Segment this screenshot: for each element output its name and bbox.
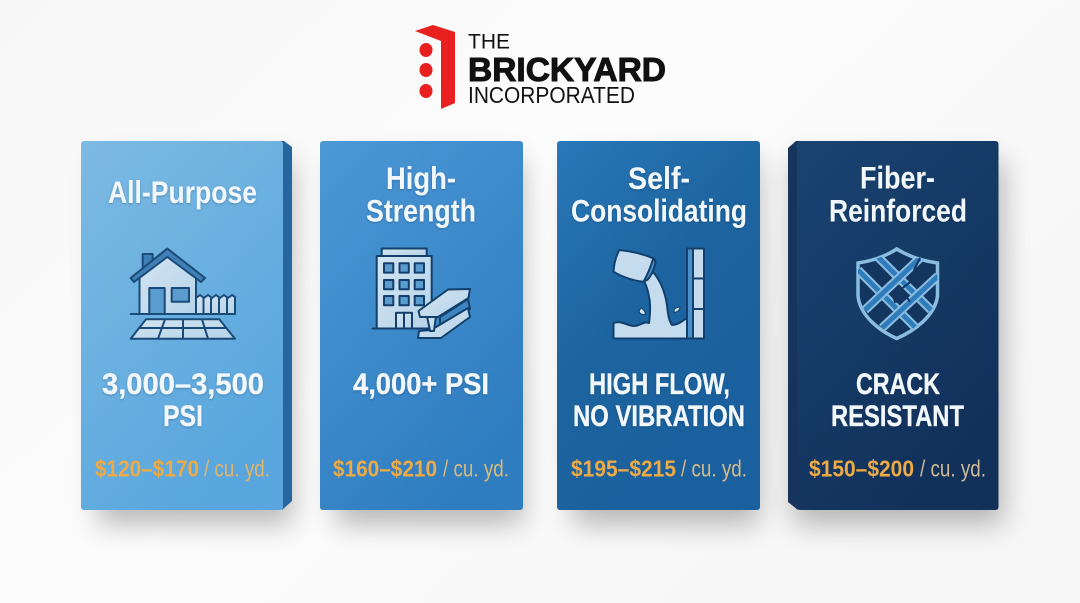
spec: NO VIBRATION [573,400,745,433]
heading: Reinforced [829,192,967,228]
logo text: THE [468,30,510,54]
heading: All-Purpose [108,174,257,210]
heading [829,160,967,228]
logo text: INCORPORATED [468,82,635,108]
logo text [468,30,666,108]
spec: 3,000–3,500 [102,368,264,401]
price: $160–$210 [333,456,437,482]
icon: building and steel beam [372,248,470,338]
panel: All-Purpose [81,141,292,524]
price [333,456,509,482]
spec [102,368,264,433]
heading: Consolidating [571,192,747,228]
panel: Fiber-Reinforced [788,141,1003,524]
price: / cu. yd. [204,456,270,482]
spec [831,368,964,433]
heading: Strength [366,192,476,228]
icon: concrete pour against formwork [614,248,704,338]
heading [366,160,476,228]
spec: 4,000+ PSI [353,368,489,401]
heading: Fiber- [860,160,935,196]
spec: HIGH FLOW, [589,368,730,401]
logo text: BRICKYARD [468,51,666,88]
panel: High-Strength [320,141,523,524]
spec [573,368,745,433]
panel: Self-Consolidating [557,141,760,524]
price: / cu. yd. [681,456,747,482]
price: / cu. yd. [920,456,986,482]
spec: PSI [163,400,203,433]
price [809,456,986,482]
price: $150–$200 [809,456,914,482]
heading: Self- [628,160,690,196]
heading [571,160,747,228]
price [95,456,270,482]
icon: house with fence and pavers [131,248,235,339]
price: $195–$215 [571,456,676,482]
price: $120–$170 [95,456,199,482]
price: / cu. yd. [443,456,509,482]
icon: red brick mark [415,25,455,109]
spec: CRACK [856,368,940,401]
price [571,456,747,482]
heading: High- [386,160,456,196]
spec: RESISTANT [831,400,964,433]
icon: shield with fiber weave and crack [858,249,938,338]
logo: The Brickyard Incorporated [415,25,666,109]
